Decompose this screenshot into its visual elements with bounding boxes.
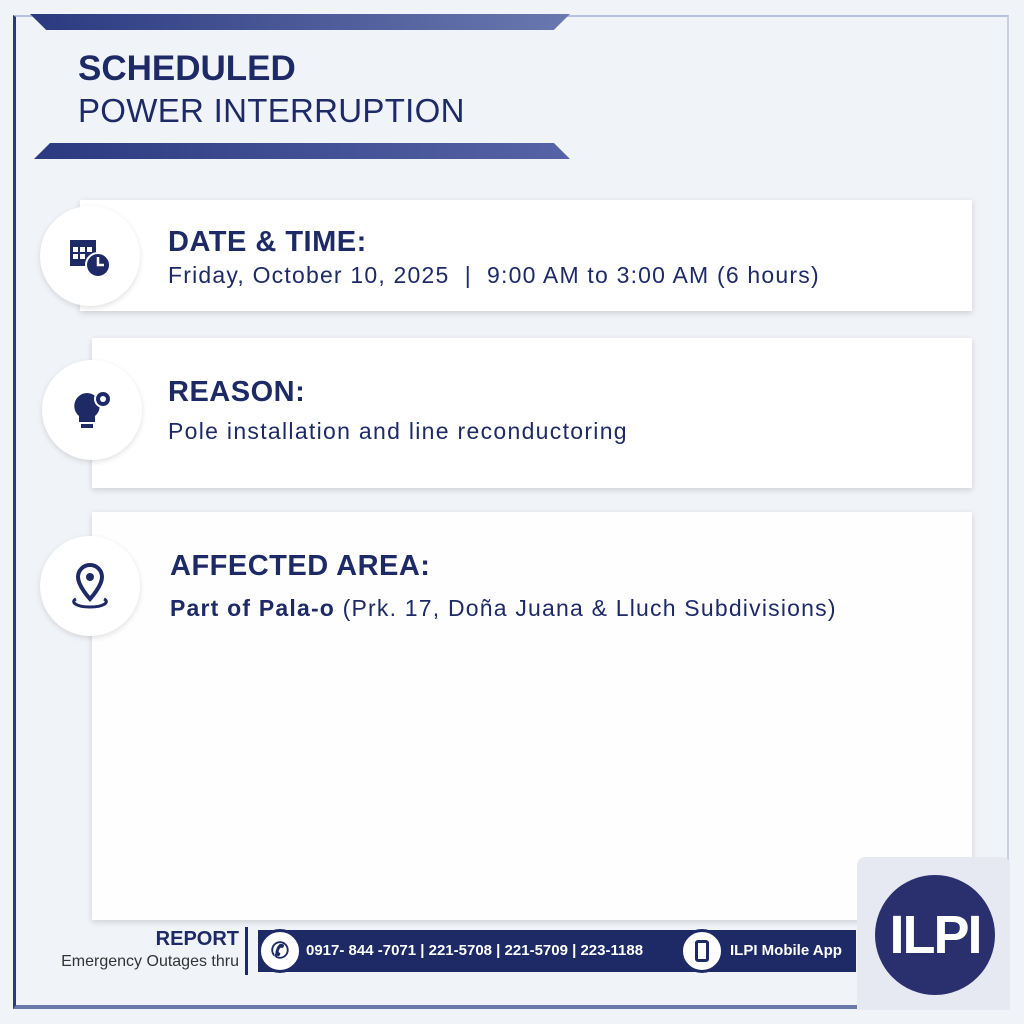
- panel: date & time: DATE & TIME:: [168, 226, 367, 258]
- hotline bar: 0917- 844 -7071 | 221-5708 | 221-5709 | 223-1188: [306, 942, 643, 959]
- report label: Emergency Outages thru: [61, 953, 239, 970]
- panel: reason: [92, 338, 972, 488]
- top bar: [30, 14, 570, 30]
- logo: ILPI: [889, 905, 980, 965]
- hotline bar: ✆: [271, 938, 289, 963]
- report label: [20, 927, 248, 975]
- panel: reason: Pole installation and line reconductoring: [168, 418, 628, 444]
- panel: affected area: AFFECTED AREA:: [170, 550, 430, 582]
- hotline bar: [258, 930, 856, 972]
- report label: REPORT: [156, 928, 239, 950]
- title: [78, 49, 465, 129]
- panel: date & time: [80, 200, 972, 311]
- panel: reason: REASON:: [168, 376, 305, 408]
- icon: bulb gear: [42, 360, 142, 460]
- title: SCHEDULED: [78, 49, 296, 88]
- icon: location pin: [40, 536, 140, 636]
- title underline bar: [34, 143, 570, 159]
- hotline bar: ILPI Mobile App: [730, 942, 842, 959]
- panel: affected area: [92, 512, 972, 920]
- title: POWER INTERRUPTION: [78, 92, 465, 129]
- logo: [857, 857, 1010, 1010]
- icon: calendar clock: [40, 206, 140, 306]
- panel: affected area: Part of Pala-o (Prk. 17, Doña Juana & Lluch Subdivisions): [170, 595, 837, 621]
- panel: date & time: Friday, October 10, 2025 | 9:00 AM to 3:00 AM (6 hours): [168, 262, 820, 288]
